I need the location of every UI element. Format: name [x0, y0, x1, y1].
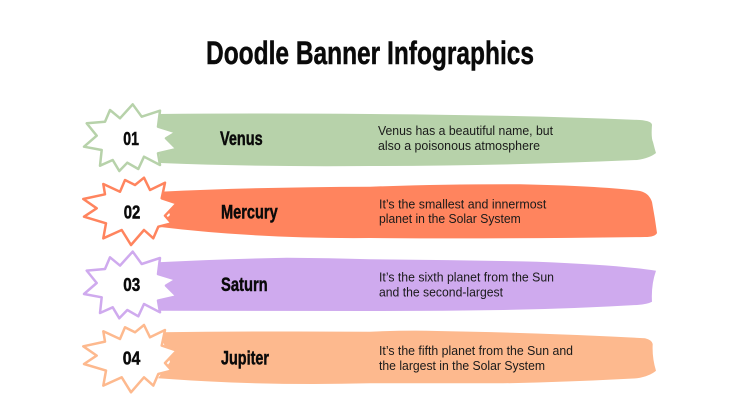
description: Saturn: and the second-largest [379, 285, 503, 300]
description: Jupiter: It’s the fifth planet from the Sun and [379, 343, 573, 358]
banner: Mercury [158, 184, 657, 238]
icon: Saturn star badge [84, 252, 177, 318]
icon: Jupiter star badge [83, 325, 177, 392]
title: Doodle Banner Infographics [206, 35, 534, 71]
panel: Mercury [83, 178, 657, 245]
description: Saturn: It’s the sixth planet from the Sun [379, 270, 554, 285]
description: Jupiter: the largest in the Solar System [379, 358, 545, 373]
banner: Jupiter [158, 331, 656, 384]
panel: Venus [84, 104, 656, 171]
description: Venus: Venus has a beautiful name, but [378, 123, 553, 138]
number 01: 01 [123, 129, 139, 149]
icon: Mercury star badge [83, 178, 177, 245]
description: Mercury: It’s the smallest and innermost [379, 196, 547, 211]
label: Mercury: Mercury [221, 202, 278, 223]
banner: Saturn [158, 258, 656, 311]
label: Jupiter: Jupiter [221, 348, 269, 369]
banner: Venus [158, 114, 656, 166]
label: Venus: Venus [220, 129, 263, 150]
label: Saturn: Saturn [221, 275, 268, 296]
panel: Saturn [84, 252, 656, 318]
panel: Jupiter [83, 325, 656, 392]
number 03: 03 [123, 275, 140, 295]
icon: Venus star badge [84, 104, 177, 171]
number 04: 04 [123, 348, 140, 368]
description: Venus: also a poisonous atmosphere [378, 138, 540, 153]
description: Mercury: planet in the Solar System [379, 211, 521, 226]
number 02: 02 [124, 202, 140, 222]
